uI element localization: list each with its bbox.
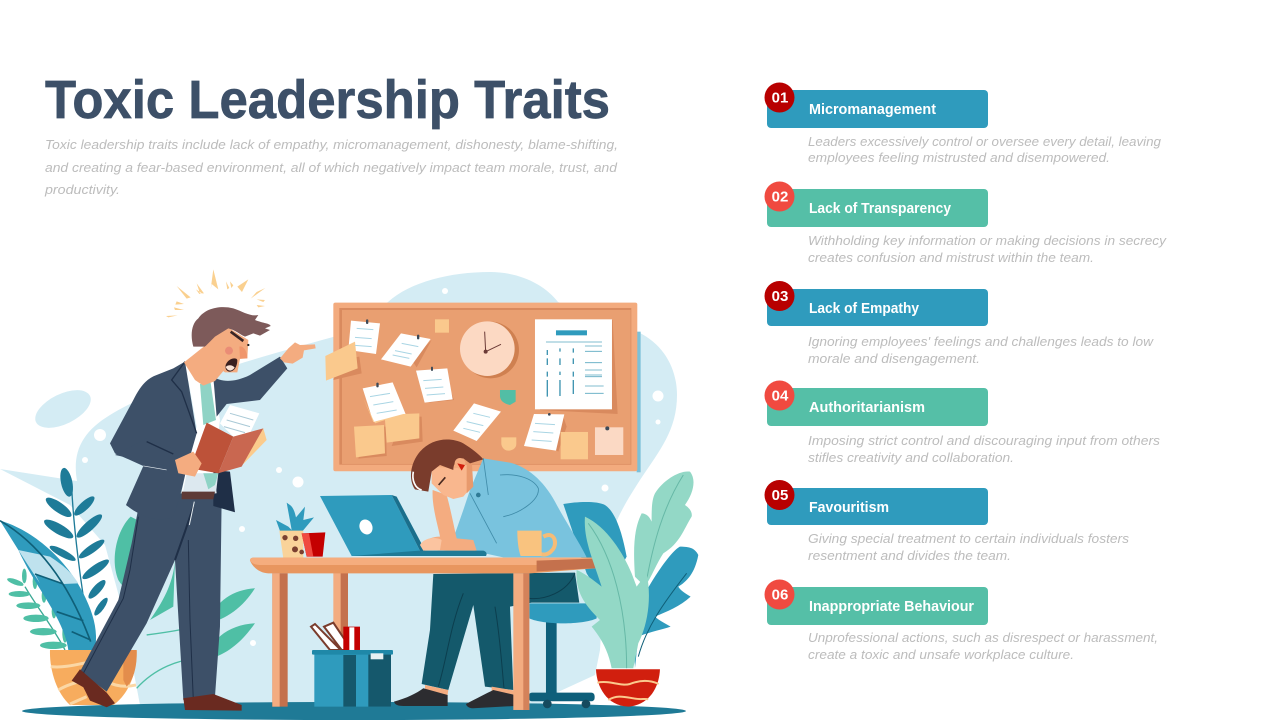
item 01: Micromanagement: [764, 82, 1161, 165]
intro text: and creating a fear-based environment, all of which negatively impact team morale, trust, and: [45, 161, 618, 175]
desk: [250, 440, 698, 710]
item 05: Favouritism: Giving special treatment to certain individuals fosters: [808, 532, 1129, 546]
note shadows: [333, 340, 567, 459]
trousers: [80, 493, 222, 700]
item 02: Lack of Transparency: [764, 182, 1167, 265]
right plant: [576, 471, 698, 707]
chart paper: [535, 319, 618, 414]
item 02: Lack of Transparency: 02: [772, 188, 788, 206]
green leaves behind boss: [115, 517, 255, 688]
belt: [182, 492, 215, 499]
intro text: Toxic leadership traits include lack of empathy, micromanagement, dishonesty, blame-shifting,: [45, 138, 618, 152]
shirt: [182, 362, 220, 493]
desk top: [250, 558, 609, 573]
item 05: Favouritism: 05: [772, 487, 788, 504]
item 04: Authoritarianism: 04: [772, 388, 789, 404]
item 05: Favouritism: Favouritism: [809, 499, 889, 516]
angry boss: [72, 269, 316, 711]
item 04: Authoritarianism: Imposing strict control and discouraging input from others: [808, 434, 1160, 448]
seated man legs and shoes: [394, 573, 579, 708]
alarm rays: [166, 269, 265, 317]
item 02: Lack of Transparency: Lack of Transparency: [809, 200, 952, 217]
item 05: Favouritism: [764, 480, 1129, 563]
intro text: [44, 138, 618, 197]
item 06: Inappropriate Behaviour: [764, 580, 1158, 662]
item 03: Lack of Empathy: 03: [772, 288, 788, 305]
chair: [529, 502, 627, 708]
title: Toxic Leadership Traits: [45, 70, 610, 130]
left plants: [0, 467, 137, 705]
item 04: Authoritarianism: Authoritarianism: [809, 399, 925, 416]
raised arm: [213, 357, 287, 417]
jacket flap: [213, 470, 235, 512]
shoes: [72, 669, 242, 711]
red cup: [302, 532, 325, 557]
item 03: Lack of Empathy: Ignoring employees' feelings and challenges leads to low: [808, 335, 1154, 349]
teal fern: [42, 467, 111, 647]
head: [184, 307, 271, 386]
item 02: Lack of Transparency: Withholding key information or making decisions in secrecy: [808, 234, 1167, 248]
intro text: productivity.: [44, 183, 120, 197]
back leg: [333, 572, 348, 655]
small potted plant: [276, 503, 314, 558]
big blue leaf: [0, 521, 96, 650]
item 06: Inappropriate Behaviour: create a toxic and unsafe workplace culture.: [808, 648, 1074, 662]
storage box with books: [311, 623, 393, 707]
seated man arm and head: [411, 440, 483, 551]
hand with folder: [175, 405, 267, 477]
desk legs: [272, 573, 529, 710]
laptop: [320, 495, 487, 556]
item 06: Inappropriate Behaviour: Inappropriate Behaviour: [809, 598, 974, 615]
item 04: Authoritarianism: [764, 380, 1160, 465]
item 01: Micromanagement: Micromanagement: [809, 101, 936, 118]
hand on keyboard: [420, 538, 442, 551]
item 01: Micromanagement: Leaders excessively control or oversee every detail, leaving: [808, 135, 1161, 149]
item 06: Inappropriate Behaviour: Unprofessional actions, such as disrespect or harassment,: [808, 631, 1158, 645]
cork board: [325, 303, 641, 472]
pointing hand: [280, 342, 316, 364]
jacket body: [110, 362, 197, 519]
item 06: Inappropriate Behaviour: 06: [772, 586, 788, 604]
background blob: [0, 272, 677, 705]
item 03: Lack of Empathy: Lack of Empathy: [809, 300, 920, 317]
item 03: Lack of Empathy: [764, 281, 1154, 366]
clock: [460, 321, 519, 378]
orange pot: [50, 650, 137, 705]
mug: [517, 531, 555, 556]
item 05: Favouritism: resentment and divides the team.: [808, 549, 1011, 563]
item 01: Micromanagement: employees feeling mistrusted and disempowered.: [808, 151, 1110, 165]
ground shadow: [22, 702, 686, 720]
item 02: Lack of Transparency: creates confusion and mistrust within the team.: [808, 251, 1094, 265]
illustration: office scene: [0, 269, 698, 720]
notes: [348, 321, 564, 451]
green fern: [6, 569, 68, 650]
item 03: Lack of Empathy: morale and disengagement.: [808, 352, 980, 366]
item 01: Micromanagement: 01: [772, 90, 788, 106]
item 04: Authoritarianism: stifles creativity and collaboration.: [808, 451, 1014, 465]
seated man torso: [454, 458, 587, 557]
